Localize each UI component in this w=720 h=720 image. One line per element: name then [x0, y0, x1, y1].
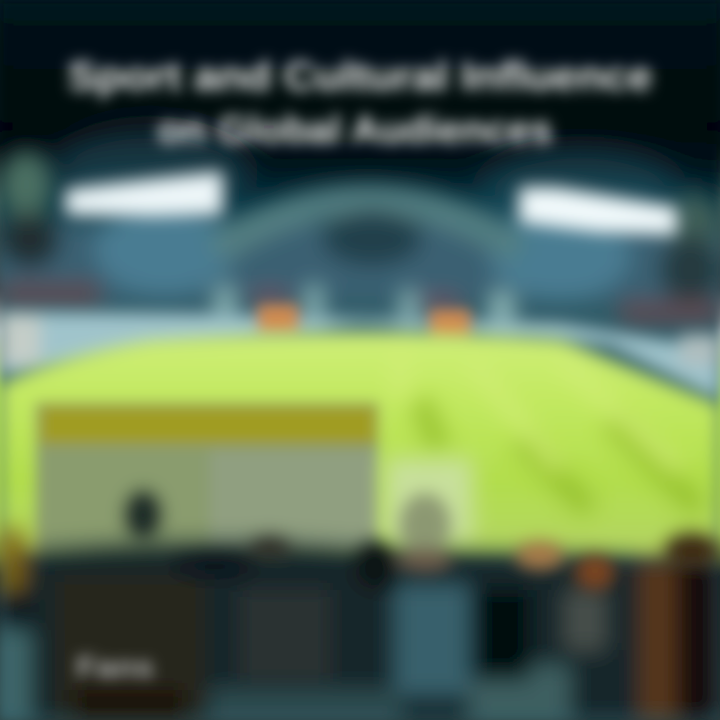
stadium stands — [0, 151, 720, 324]
caption label: Fans — [76, 651, 154, 684]
information panel — [36, 403, 378, 555]
title: on Global Audiences — [158, 109, 552, 152]
crowd heads — [125, 491, 720, 590]
football pitch — [0, 332, 720, 560]
title: Sport and Cultural Influence — [68, 53, 652, 99]
orange accents in the stands — [258, 305, 470, 340]
light beams towards the pitch — [215, 285, 514, 335]
title — [68, 53, 652, 152]
stadium floodlights — [50, 125, 680, 235]
crowd in the foreground — [0, 530, 720, 720]
pale secondary panel — [385, 458, 473, 543]
panel header — [40, 406, 376, 444]
pale band behind the pitch — [0, 312, 720, 400]
